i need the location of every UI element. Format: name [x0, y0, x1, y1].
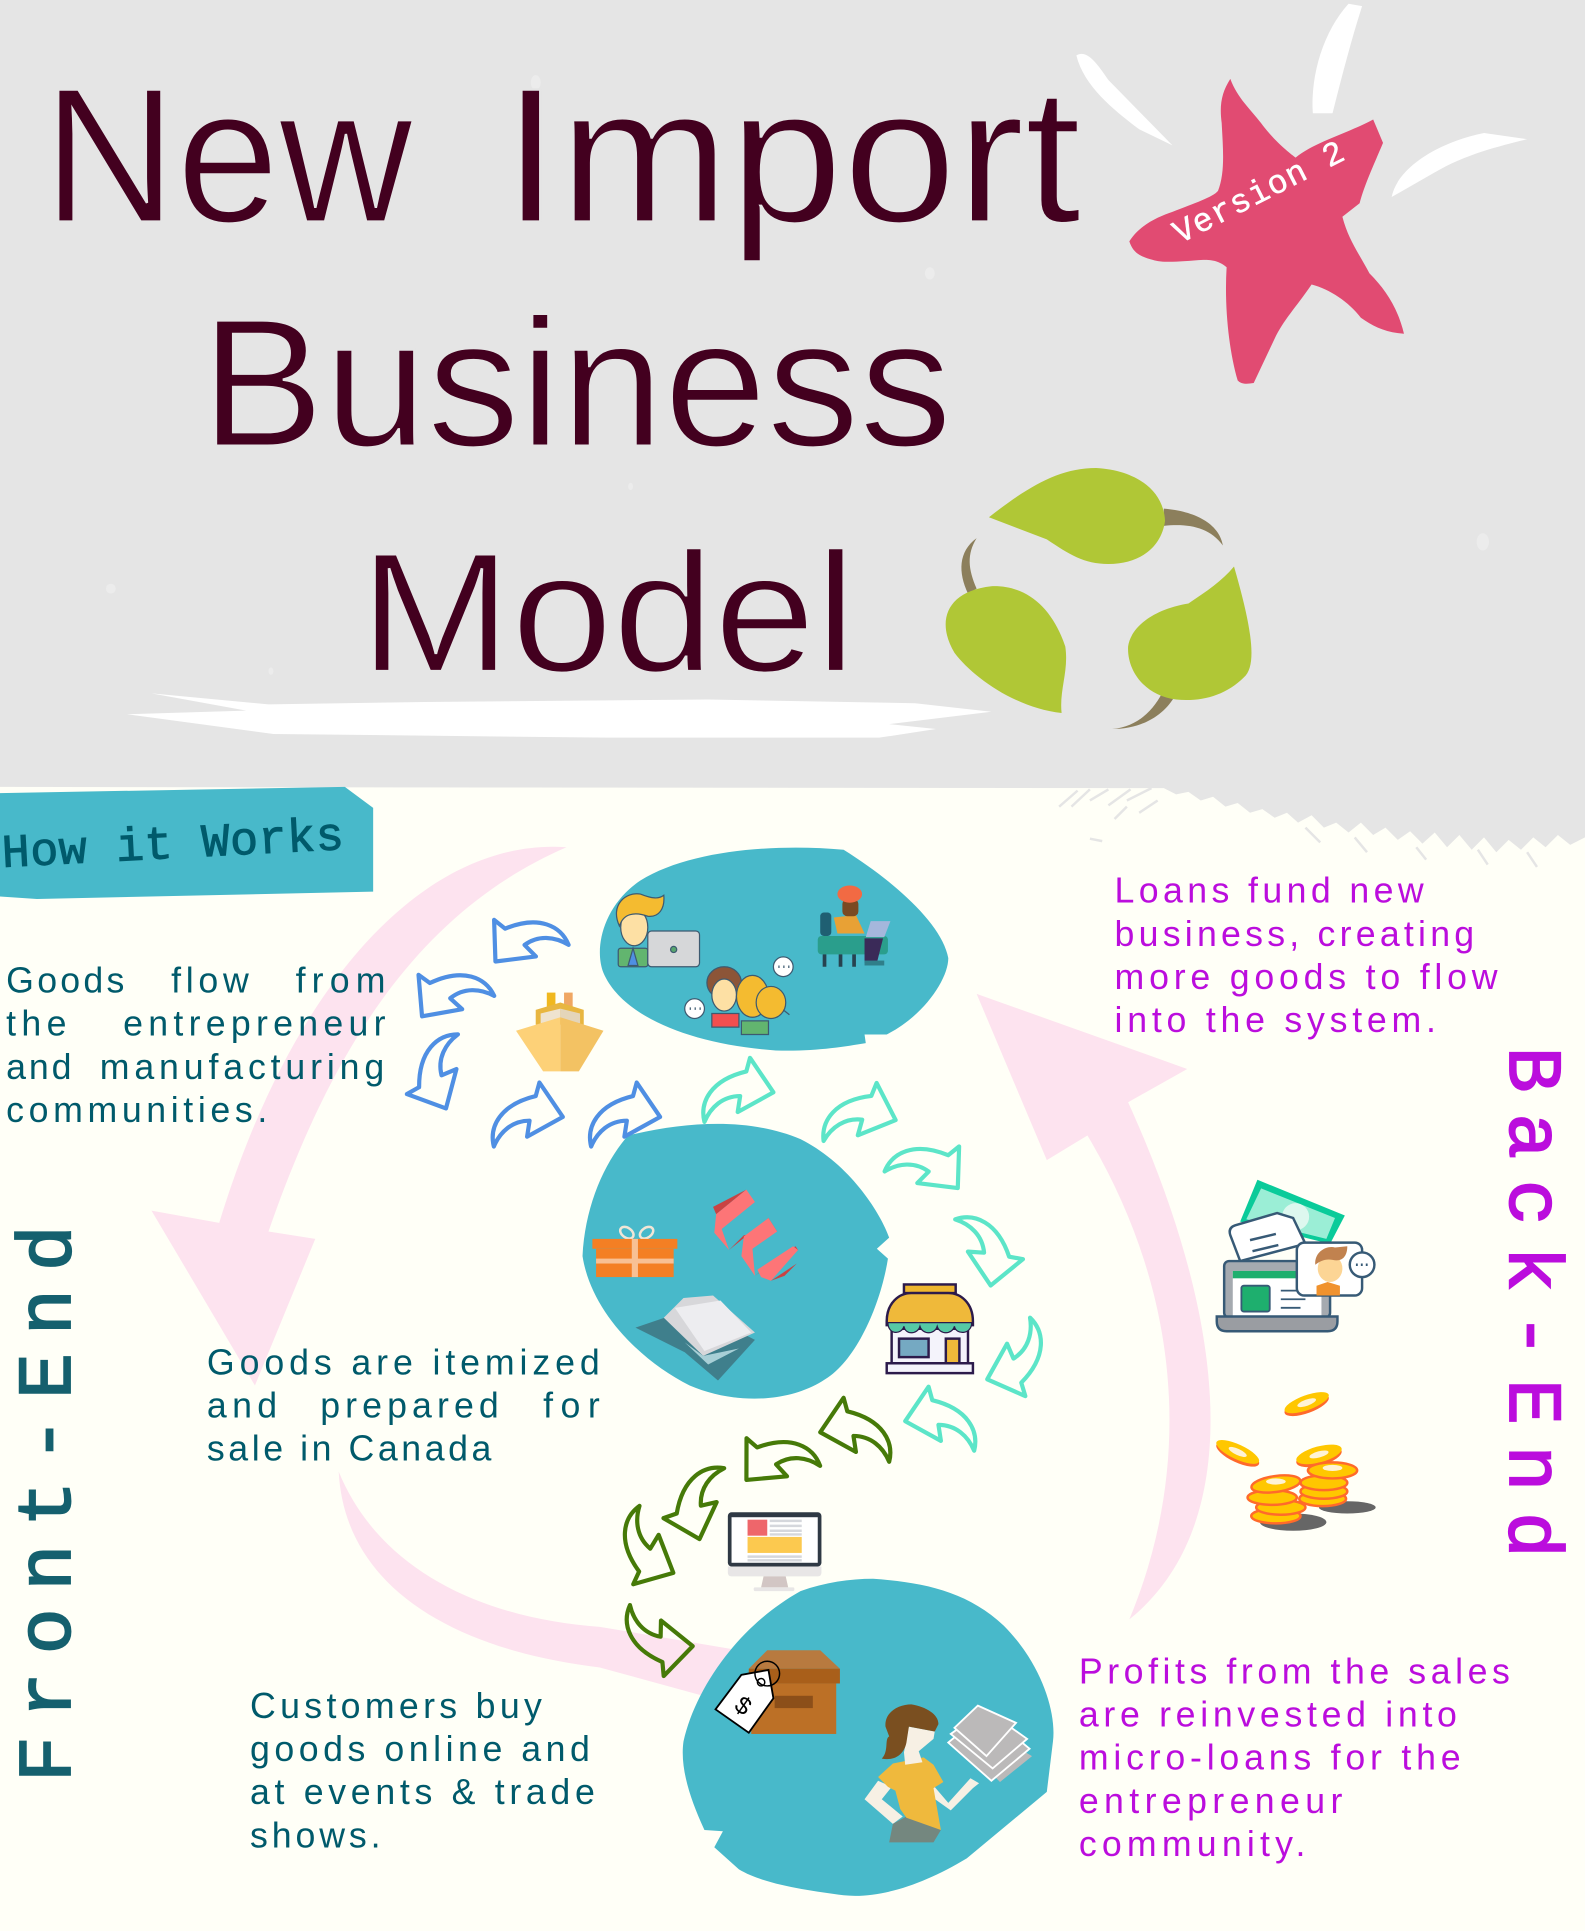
text: goods flow: manufacturing: [100, 1047, 384, 1087]
title: New: [43, 48, 414, 263]
text: profits: [1079, 1651, 1510, 1864]
text: goods flow: [6, 961, 386, 1130]
icon: coins: [1213, 1388, 1376, 1531]
title: Model: [360, 518, 856, 708]
pink flow arrow: bottom curve: [339, 1472, 739, 1706]
title: [43, 48, 1081, 708]
text: customers buy: goods online and: [250, 1729, 590, 1769]
text: profits: are reinvested into: [1079, 1695, 1457, 1735]
icon: monitor: [728, 1512, 821, 1591]
text: customers buy: shows.: [250, 1815, 381, 1855]
back-end label: Back-End: [1487, 1047, 1574, 1558]
blue arrows: [396, 892, 660, 1147]
text: profits: entrepreneur: [1079, 1781, 1342, 1821]
text: goods flow: from: [296, 961, 385, 1001]
header background: [0, 0, 1585, 867]
icon: shop: [887, 1284, 973, 1373]
blob: customers: [683, 1579, 1053, 1896]
text: customers buy: Customers buy: [250, 1686, 542, 1726]
title: Business: [201, 281, 952, 485]
text: customers buy: at events & trade: [250, 1772, 595, 1812]
text: loans: into the system.: [1115, 1000, 1436, 1040]
icon: man with laptop: [616, 894, 700, 967]
text: profits: community.: [1079, 1824, 1305, 1864]
icon: ship: [516, 993, 603, 1071]
text: profits: Profits from the sales: [1079, 1651, 1510, 1691]
text: goods flow: flow: [171, 961, 249, 1001]
text: goods flow: communities.: [6, 1090, 267, 1130]
icon: red ribbon: [713, 1190, 798, 1281]
how it works heading: How it Works: [0, 811, 345, 882]
text: loans: more goods to flow: [1115, 957, 1498, 997]
recycle leaves icon: [946, 468, 1251, 729]
text: loans: [1115, 871, 1498, 1040]
title: Import: [502, 48, 1081, 263]
blob: itemized goods: [583, 1124, 889, 1399]
text: customers buy: [250, 1686, 595, 1855]
text: goods itemized: Goods are itemized: [207, 1342, 600, 1382]
blob: community: [600, 848, 948, 1051]
text: goods itemized: sale in Canada: [207, 1429, 492, 1469]
icon: box with price tag: [716, 1650, 840, 1734]
text: goods itemized: prepared: [320, 1385, 499, 1425]
text: goods flow: and: [6, 1047, 71, 1087]
text: goods flow: Goods: [6, 961, 124, 1001]
text: goods itemized: for: [543, 1385, 600, 1425]
green arrows: [597, 1398, 890, 1680]
pink flow arrow: back-end: [977, 994, 1211, 1619]
front-end label: Front-End: [6, 1225, 93, 1782]
text: goods itemized: and: [207, 1385, 277, 1425]
icon: stack of papers: [635, 1296, 755, 1381]
text: goods flow: the: [6, 1004, 67, 1044]
text: goods itemized: [207, 1342, 600, 1469]
icon: person in armchair: [818, 885, 890, 967]
text: profits: micro-loans for the: [1079, 1738, 1461, 1778]
pink flow arrow: front-end: [151, 847, 567, 1385]
icon: two women talking: [685, 957, 793, 1034]
icon: gift box: [592, 1224, 677, 1277]
text: loans: Loans fund new: [1115, 871, 1424, 911]
white accent strokes: [1076, 4, 1527, 197]
icon: box with price tag: $: [729, 1691, 756, 1721]
text: loans: business, creating: [1115, 914, 1474, 954]
icon: woman with papers: [865, 1704, 1032, 1842]
white brush under title: [127, 693, 991, 738]
how it works banner: [0, 787, 373, 899]
icon: laptop with money: [1217, 1180, 1374, 1331]
version label: Version 2: [1167, 134, 1351, 253]
text: goods flow: entrepreneur: [123, 1004, 386, 1044]
star badge: [1129, 79, 1404, 384]
teal arrows: [703, 1058, 1065, 1451]
